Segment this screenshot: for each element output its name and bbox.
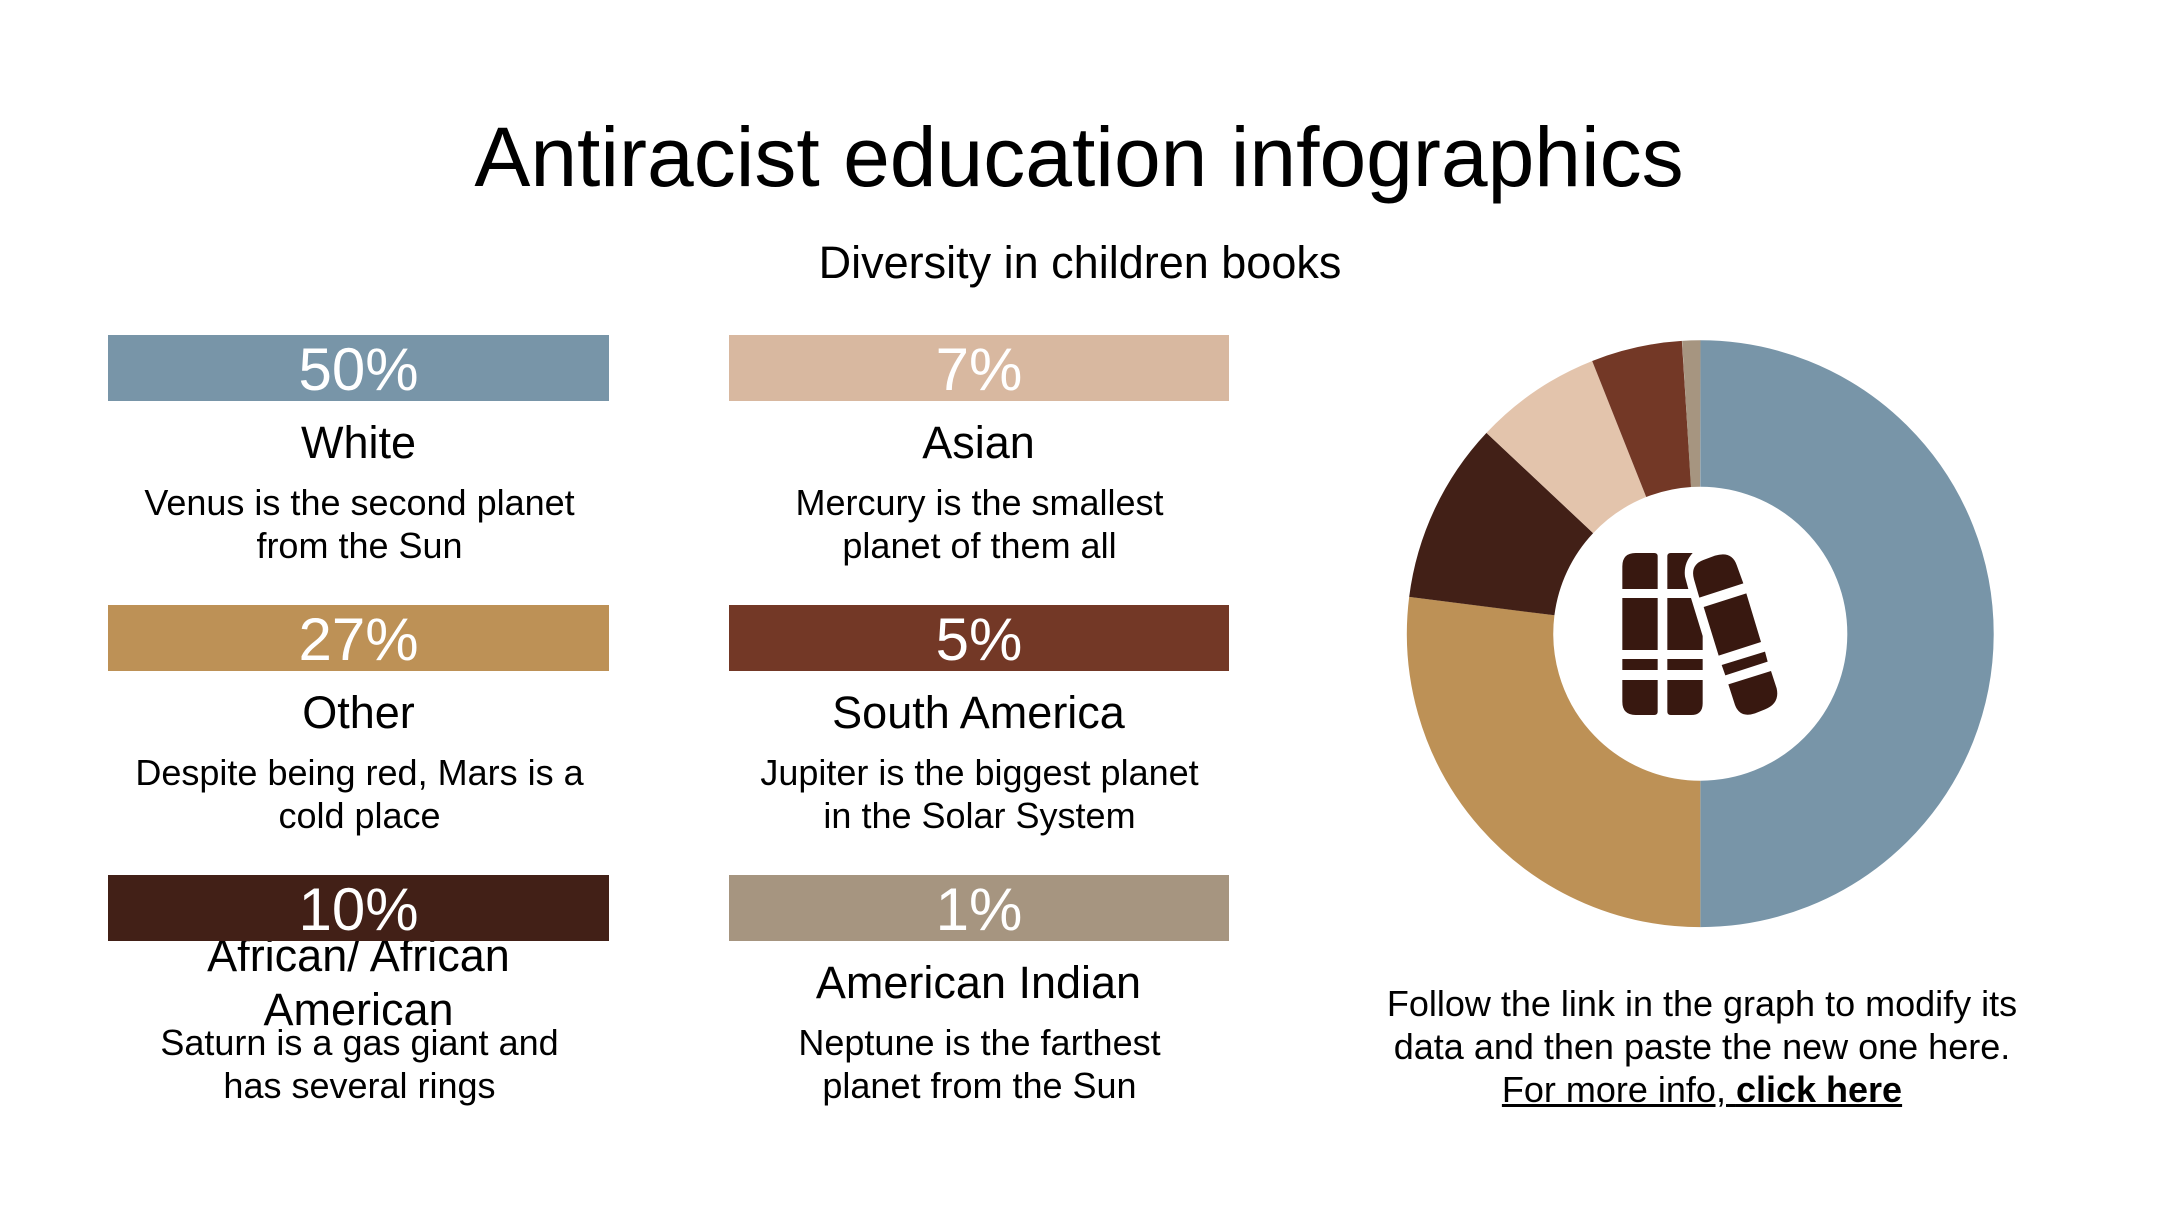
description: African American: has several rings <box>223 1065 496 1106</box>
chart note: For more info, click here <box>1502 1069 1902 1110</box>
description: South America: in the Solar System <box>823 795 1136 836</box>
panel: African American 10% <box>108 875 609 1106</box>
subtitle: Diversity in children books <box>819 237 1341 288</box>
description: Asian: planet of them all <box>842 525 1117 566</box>
label: Asian: Asian <box>922 417 1035 468</box>
panel: White 50% <box>108 335 609 566</box>
percentage bar: 50%: 50% <box>298 336 419 403</box>
percentage bar: 27%: 27% <box>298 606 419 673</box>
description: Asian: Mercury is the smallest <box>795 482 1164 523</box>
percentage bar: 27% <box>108 605 609 671</box>
description: American Indian: planet from the Sun <box>822 1065 1137 1106</box>
percentage bar: 10%: 10% <box>298 876 419 943</box>
description: Other <box>135 752 584 836</box>
description: American Indian <box>798 1022 1161 1106</box>
percentage bar: 7% <box>729 335 1229 401</box>
description: South America: Jupiter is the biggest planet <box>760 752 1199 793</box>
label: White: White <box>301 417 416 468</box>
percentage bar: 10% <box>108 875 609 941</box>
percentage bar: 5%: 5% <box>936 606 1022 673</box>
book 2 <box>1667 553 1703 715</box>
label: African/ African American: American <box>263 984 454 1035</box>
description: Asian <box>795 482 1164 566</box>
description: American Indian: Neptune is the farthest <box>798 1022 1161 1063</box>
percentage bar: 5% <box>729 605 1229 671</box>
donut chart <box>1406 340 1994 928</box>
description: African American: Saturn is a gas giant and <box>160 1022 559 1063</box>
label: South America: South America <box>832 687 1125 738</box>
chart note: data and then paste the new one here. <box>1394 1026 2010 1067</box>
panel: American Indian 1% <box>729 875 1229 1106</box>
description: South America <box>760 752 1199 836</box>
description: White: Venus is the second planet <box>144 482 575 523</box>
slice: African American 10% <box>1482 483 1540 606</box>
description: Other: cold place <box>278 795 441 836</box>
chart note: Follow the link in the graph to modify its <box>1387 983 2017 1024</box>
panel: Other 27% <box>108 605 609 836</box>
slice: Asian 7% <box>1540 429 1619 483</box>
slice: White 50% <box>1700 414 1920 854</box>
description: Other: Despite being red, Mars is a <box>135 752 584 793</box>
icon: books <box>1622 553 1778 715</box>
panel: Asian 7% <box>729 335 1229 566</box>
slice: South America 5% <box>1619 414 1686 429</box>
panel: South America 5% <box>729 605 1229 836</box>
description: White: from the Sun <box>256 525 463 566</box>
slice: Other 27% <box>1480 606 1700 854</box>
percentage bar: 7%: 7% <box>936 336 1022 403</box>
description: White <box>144 482 575 566</box>
label: Other: Other <box>302 687 415 738</box>
label: American Indian: American Indian <box>816 957 1141 1008</box>
slice: American Indian 1% <box>1686 340 1700 487</box>
label: African/ African American: African/ African <box>207 930 510 981</box>
description: African American <box>160 1022 559 1106</box>
percentage bar: 1% <box>729 875 1229 941</box>
title: Antiracist education infographics <box>474 110 1684 204</box>
book 1 <box>1622 553 1658 715</box>
book 3 <box>1693 554 1777 715</box>
percentage bar: 50% <box>108 335 609 401</box>
label: African/ African American <box>207 930 510 1035</box>
chart note <box>1387 983 2017 1110</box>
percentage bar: 1%: 1% <box>936 876 1022 943</box>
